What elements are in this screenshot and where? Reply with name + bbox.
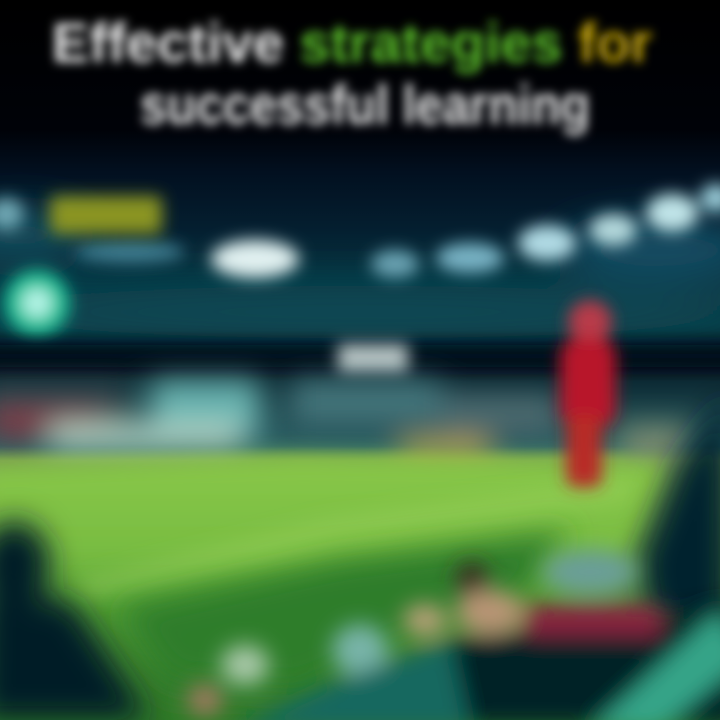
central scoreboard — [338, 344, 408, 374]
crowd in lower stands — [0, 380, 690, 465]
stadium floodlights band — [0, 184, 720, 278]
upper stand glow — [0, 210, 720, 338]
spectator silhouette: right — [640, 395, 720, 640]
player in red — [560, 300, 616, 487]
football pitch — [0, 456, 670, 700]
title — [52, 11, 652, 136]
title line 1: Effective strategies for — [52, 11, 652, 74]
spectators in the foreground — [187, 550, 720, 720]
spectator silhouette: left — [0, 521, 150, 720]
title line 2: successful learning — [140, 73, 590, 136]
dark band under the stands — [0, 345, 720, 367]
pitch shade below the line — [120, 530, 570, 690]
yellow label badge — [50, 196, 162, 234]
pitch marking — [80, 490, 630, 590]
green circular icon — [4, 270, 70, 336]
